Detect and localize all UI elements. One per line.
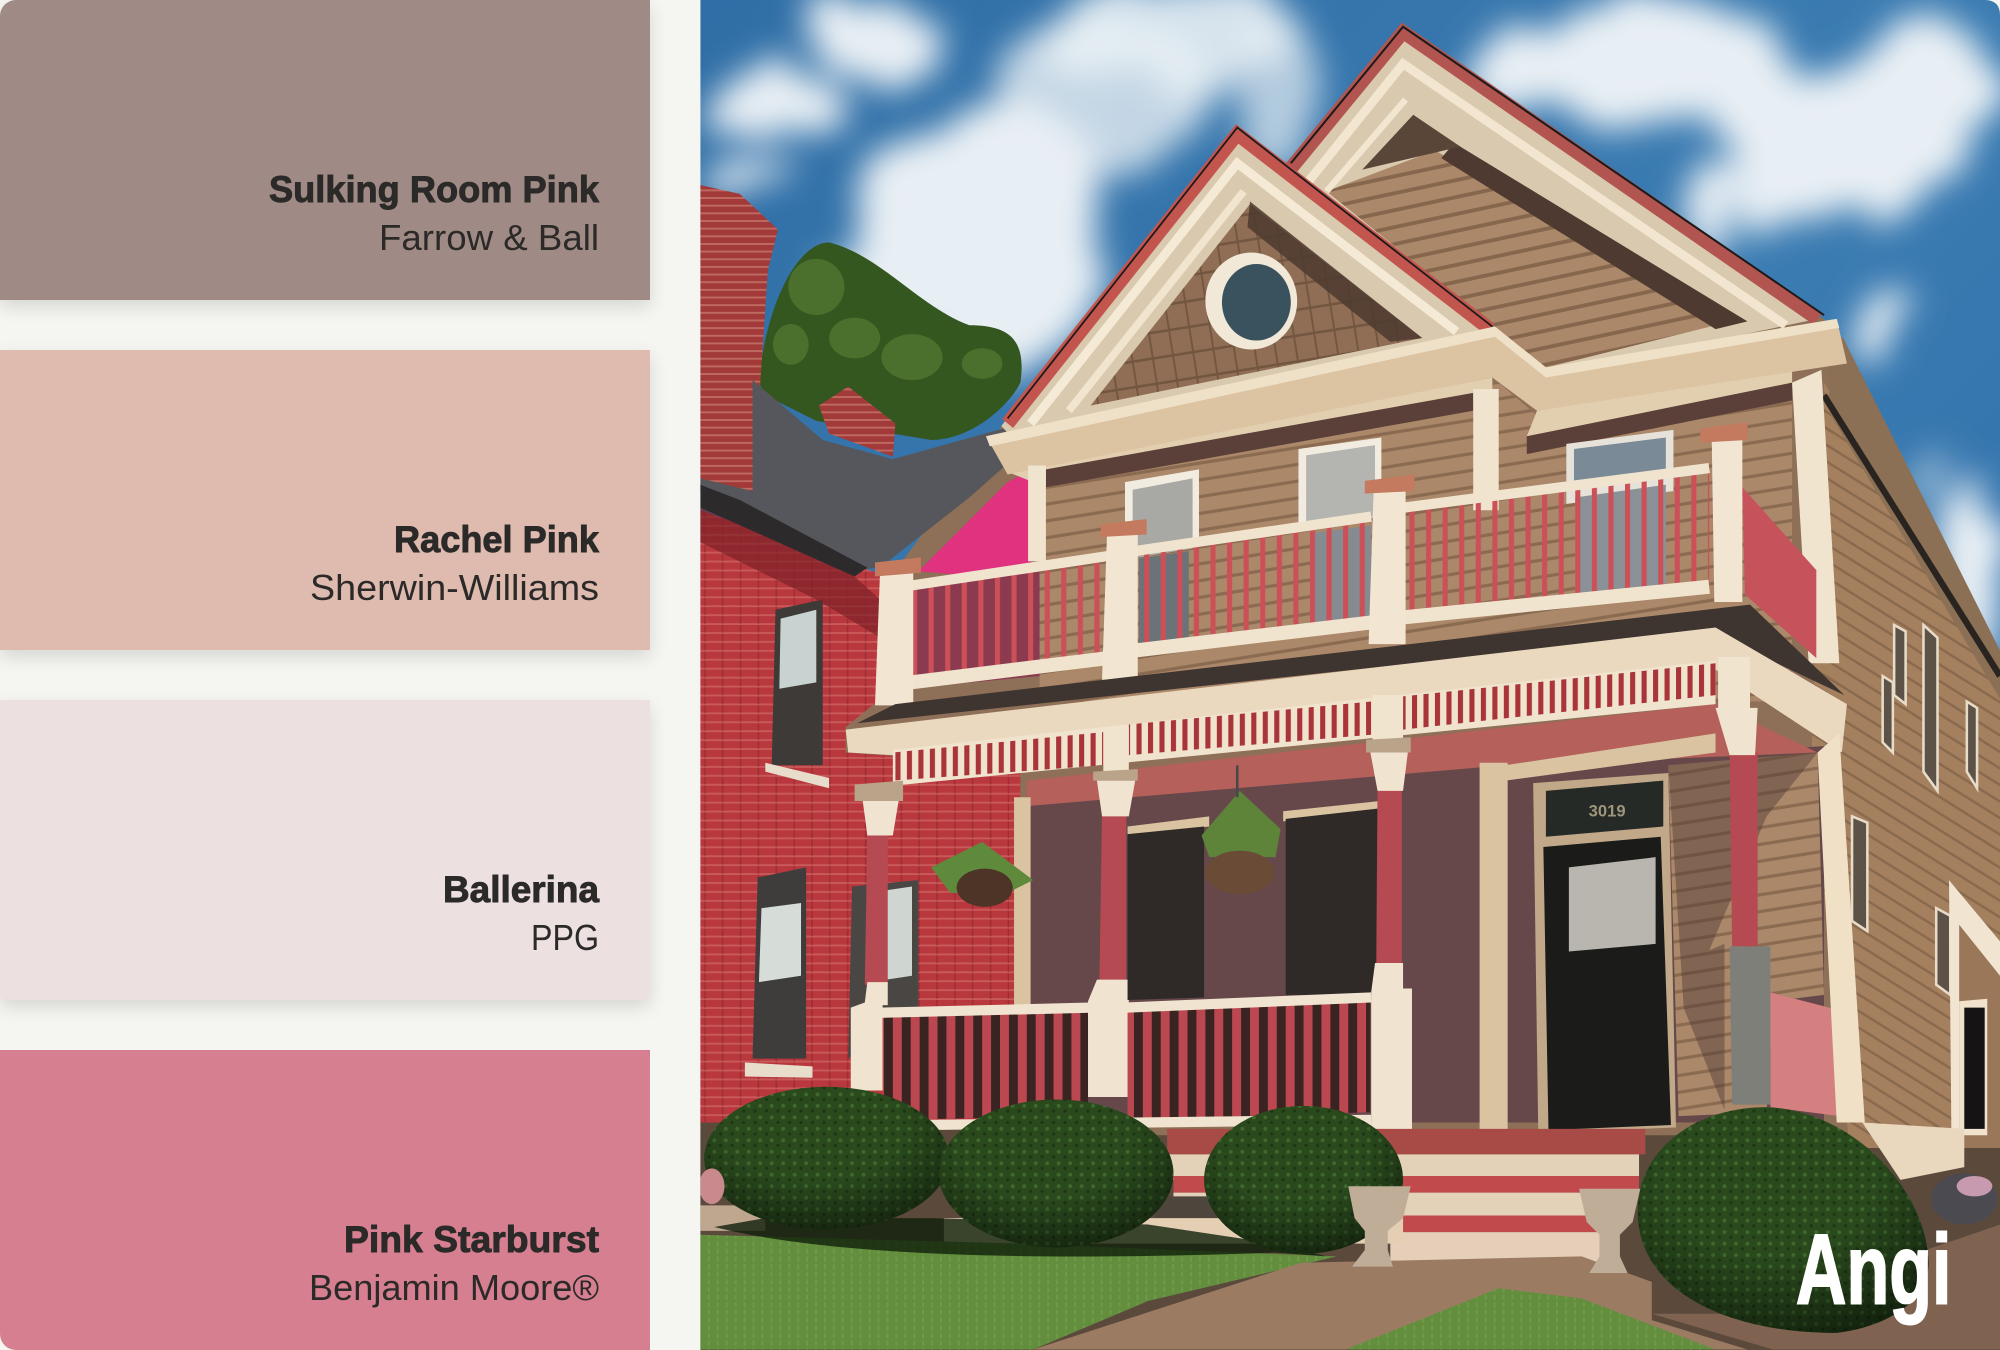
house base	[1862, 1122, 1964, 1180]
panel: swatch Pink Starburst	[0, 1050, 650, 1350]
brick windows	[745, 599, 918, 1078]
siding shadow bands	[1046, 383, 1792, 487]
side porch pink panel	[1770, 992, 1839, 1116]
siding shade	[1668, 753, 1818, 1110]
front door	[1543, 837, 1671, 1130]
small chimney	[819, 386, 895, 457]
porch wall	[1027, 746, 1824, 1122]
small lawn	[1346, 1288, 1716, 1349]
hanging planters	[931, 765, 1281, 907]
upper floor siding	[1040, 376, 1792, 702]
right eave	[1827, 329, 2000, 699]
roof eave	[700, 485, 867, 577]
back gable trim	[1291, 27, 1824, 325]
round window	[1205, 253, 1297, 349]
door frame	[1533, 773, 1676, 1133]
bushes	[704, 1087, 1929, 1333]
panel: swatch Ballerina: Ballerina	[443, 869, 599, 910]
back gable shadow	[1441, 143, 1747, 329]
frieze dentils	[893, 657, 1750, 786]
side ground	[700, 1205, 765, 1231]
transom	[1546, 781, 1663, 837]
balcony fascia	[846, 628, 1847, 755]
magenta striped wall	[920, 476, 1031, 574]
brick shadow under eave	[700, 508, 880, 638]
front gable trim	[1008, 128, 1492, 423]
steps	[944, 1129, 1645, 1263]
door reflection	[1569, 857, 1656, 952]
sky	[700, 0, 2000, 1349]
columns	[851, 708, 1770, 1142]
front gable shingles	[1091, 204, 1422, 406]
bush shadow on lawn	[714, 1218, 1327, 1256]
wall trim columns	[1028, 370, 1839, 663]
rear building section	[1949, 880, 2000, 1148]
upper posts	[875, 422, 1747, 705]
clouds	[702, 0, 2000, 638]
back gable louver vent	[1362, 115, 1460, 170]
brick building	[700, 510, 1020, 1122]
panel: swatch Sulking Room Pink: Farrow & Ball	[379, 217, 599, 258]
porch trim and beam	[1014, 733, 1716, 1135]
flower beds	[699, 1168, 1997, 1224]
porch ceiling	[1027, 704, 1818, 806]
right corner trim	[1818, 733, 1865, 1122]
right side wall	[1811, 383, 2000, 1148]
photo: house with pink trim	[700, 0, 2000, 1350]
porch windows	[1128, 809, 1378, 1000]
panel: swatch Pink Starburst: Pink Starburst	[344, 1219, 599, 1260]
house silhouette backing	[846, 316, 1848, 1136]
lower railing	[880, 997, 1371, 1125]
ground backing	[700, 1097, 2000, 1350]
upper railing	[901, 468, 1709, 684]
panel: swatch Sulking Room Pink: Sulking Room Pink	[269, 169, 599, 210]
balcony deck roof	[857, 605, 1844, 723]
gray roof	[700, 380, 1027, 570]
pavement right	[1652, 1224, 2000, 1349]
panel: swatch Rachel Pink: Rachel Pink	[394, 519, 599, 560]
right side windows	[1852, 625, 1977, 995]
upper windows	[1125, 430, 1673, 651]
front gable shadow	[1247, 202, 1422, 342]
area behind left balcony	[903, 568, 1040, 689]
panel: swatch Rachel Pink: Sherwin-Williams	[310, 567, 599, 608]
lawn	[700, 1235, 1337, 1349]
back gable soffit	[1291, 32, 1818, 376]
urns	[1348, 1186, 1640, 1273]
cornice	[986, 319, 1847, 474]
panel: swatch Ballerina	[0, 700, 650, 1000]
front gable fill	[1001, 144, 1492, 432]
house number: 3019	[1589, 801, 1626, 820]
back gable siding	[1327, 151, 1741, 370]
balcony side panel	[1742, 487, 1816, 658]
right porch siding	[1668, 753, 1824, 1116]
panel: swatch Ballerina: PPG	[531, 917, 599, 958]
panel: swatch Rachel Pink	[0, 350, 650, 650]
brick chimney	[700, 185, 778, 497]
front walk	[1033, 1256, 1747, 1349]
tree	[759, 242, 1022, 440]
panel: swatch Pink Starburst: Benjamin Moore®	[309, 1267, 599, 1308]
panel: swatch Sulking Room Pink	[0, 0, 650, 300]
soffit under cornice	[1008, 367, 1792, 485]
